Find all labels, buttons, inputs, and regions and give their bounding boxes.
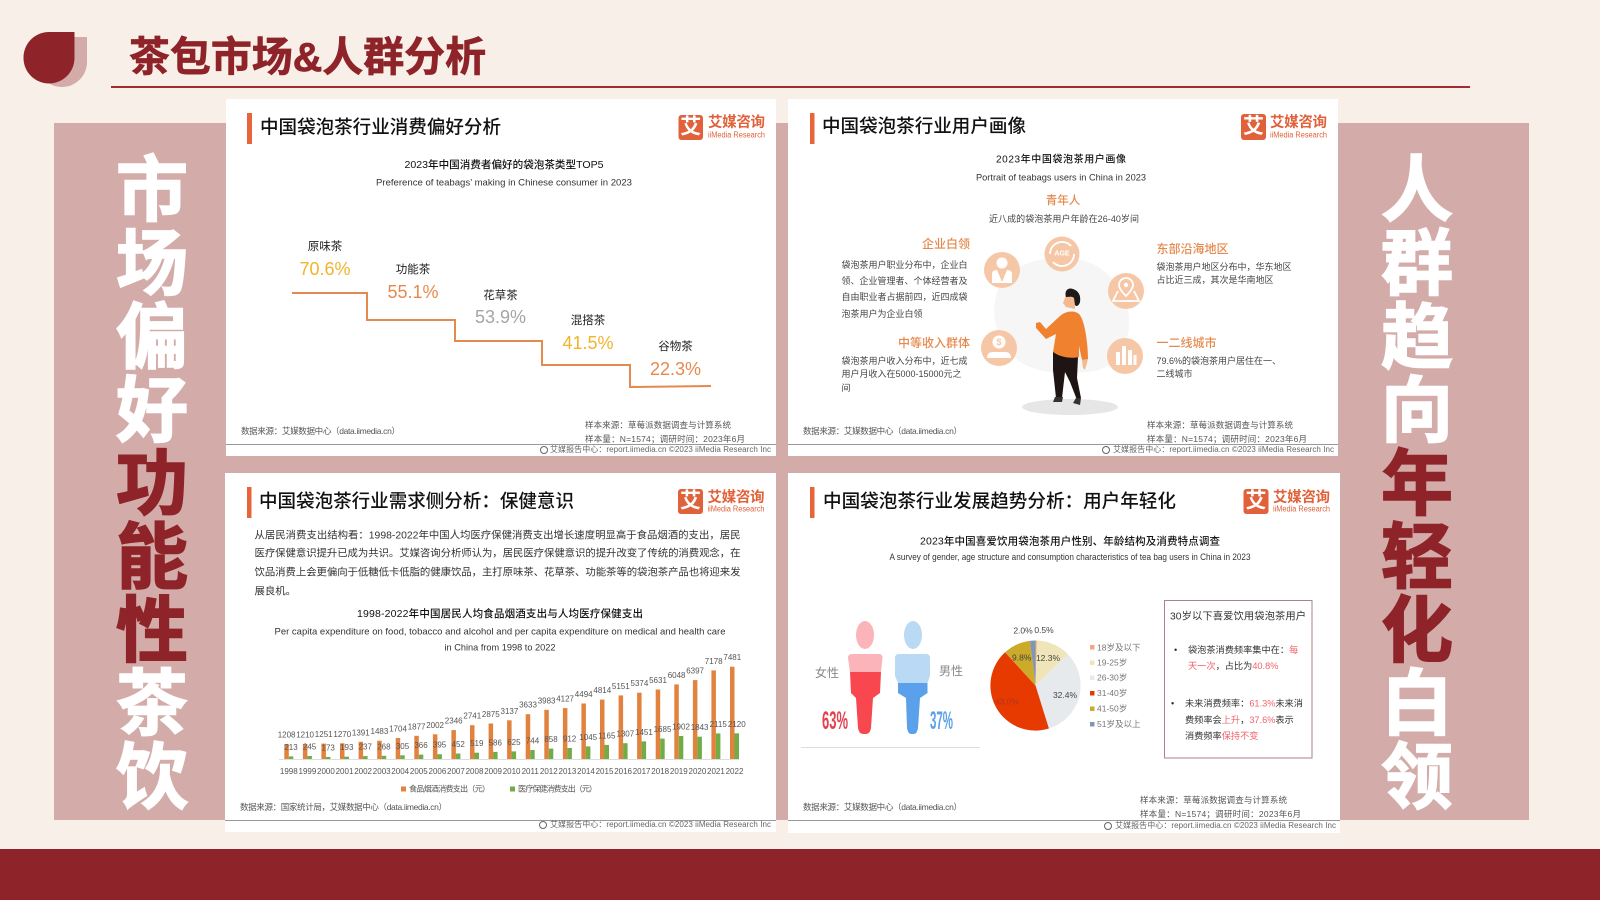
icon: map pin [1108, 273, 1144, 309]
header rule [111, 86, 1470, 88]
chart subtitle: A survey of gender, age structure and consumption characteristics of tea bag users in China in 2023 [890, 552, 1250, 563]
source note: 数据来源：艾媒数据中心（data.iimedia.cn） [241, 426, 400, 436]
pie legend: 18岁及以下 [1097, 642, 1141, 652]
panel: younger users [788, 473, 1340, 833]
intro paragraph [254, 528, 741, 598]
bar chart: 1251 [315, 730, 333, 739]
bar chart: 305 [396, 742, 410, 751]
source note: 数据来源：国家统计局，艾媒数据中心（data.iimedia.cn） [240, 802, 447, 812]
bar chart: 2005 [410, 767, 428, 776]
bar chart: 2004 [391, 767, 410, 776]
bar chart: 1270 [333, 730, 352, 739]
vertical slogan: left: 饮 [116, 738, 188, 818]
logo: 艾媒咨询 [1273, 488, 1330, 506]
figure: female 63%: 63% [822, 707, 848, 735]
panel heading: 中国袋泡茶行业消费偏好分析 [260, 116, 501, 138]
callout: middle income: 用户月收入在5000-15000元之 [842, 368, 962, 379]
step chart: 41.5% [562, 333, 614, 353]
bar chart: 912 [563, 734, 577, 744]
callout: middle income: 间 [842, 382, 851, 393]
callout: young people [989, 193, 1139, 224]
bar chart: 2015 [596, 767, 614, 776]
intro paragraph: 医疗保健意识提升已成为共识。艾媒咨询分析师认为，居民医疗保健意识的提升改变了传统的消费观念，在 [254, 546, 740, 560]
bar chart: 1210 [296, 731, 315, 740]
step chart: 70.6% [299, 259, 351, 279]
sample note: 样本量：N=1574；调研时间：2023年6月 [1147, 434, 1307, 444]
callout: tier cities [1156, 335, 1281, 379]
callout box: 消费频率保持不变 [1185, 730, 1258, 741]
callout: tier cities: 二线城市 [1156, 368, 1193, 379]
step chart: 功能茶 [396, 262, 431, 276]
bar chart: 2022 [726, 767, 744, 776]
vertical slogan: right: 化 [1381, 592, 1453, 672]
callout: eastern coast: 占比近三成，其次是华南地区 [1156, 274, 1274, 285]
vertical slogan: right: 轻 [1381, 518, 1453, 598]
callout: young people: 青年人 [1046, 193, 1081, 207]
bar chart: 1902 [672, 722, 690, 732]
callout: white collar: 领、企业管理者、个体经营者及 [842, 275, 968, 286]
callout: tier cities: 一二线城市 [1156, 335, 1217, 350]
bar chart: 2007 [447, 767, 465, 776]
bar chart: 2009 [484, 767, 503, 776]
step chart: 混搭茶 [571, 314, 606, 327]
bar chart: 1704 [389, 724, 407, 734]
vertical slogan: right [1381, 152, 1453, 818]
sample note: 样本来源：草莓派数据调查与计算系统 [1140, 795, 1287, 805]
pie legend [1090, 642, 1141, 729]
icon: age: AGE [1054, 250, 1070, 258]
bar chart [278, 653, 746, 776]
panel heading: 中国袋泡茶行业发展趋势分析：用户年轻化 [823, 490, 1176, 512]
source note: 数据来源：艾媒数据中心（data.iimedia.cn） [803, 426, 962, 436]
vertical slogan: right: 年 [1381, 445, 1453, 525]
logo: iiMedia Research [1273, 504, 1330, 514]
callout box: 未来消费频率：61.3%未来消 [1185, 698, 1303, 709]
bar chart: 2875 [482, 710, 500, 719]
intro paragraph: 从居民消费支出结构看：1998-2022年中国人均医疗保健消费支出增长速度明显高于食品烟酒的支出，居民 [254, 528, 740, 542]
vertical slogan: right: 白 [1381, 665, 1453, 745]
bar chart: 4814 [593, 686, 612, 695]
bar chart: 2021 [707, 767, 725, 776]
bar chart: 1877 [408, 722, 426, 731]
illustration backdrop blob [994, 258, 1129, 373]
callout box [1164, 600, 1312, 758]
callout box: 袋泡茶消费频率集中在：每 [1188, 644, 1298, 655]
logo: 艾 [680, 490, 701, 512]
bar chart: 1998 [280, 767, 298, 776]
step chart: 53.9% [475, 307, 526, 327]
pie chart: 32.4% [1053, 690, 1077, 700]
bar chart: 2012 [540, 767, 558, 776]
bar chart: 2011 [522, 767, 539, 776]
bar chart: 268 [377, 742, 391, 751]
source note: 数据来源：艾媒数据中心（data.iimedia.cn） [803, 802, 962, 812]
bar chart: 2002 [426, 721, 445, 730]
panel heading: 中国袋泡茶行业需求侧分析：保健意识 [259, 490, 574, 512]
bar chart: 2346 [445, 717, 463, 726]
bar chart: 5631 [649, 676, 667, 685]
bottom band [0, 849, 1600, 900]
callout: middle income [842, 335, 970, 393]
vertical slogan: left: 好 [116, 372, 188, 452]
bar chart: 2006 [429, 767, 447, 776]
icon: business person [984, 252, 1020, 288]
report footer: 艾媒报告中心：report.iimedia.cn ©2023 iiMedia Research Inc [550, 444, 771, 454]
pie legend: 41-50岁 [1097, 704, 1127, 714]
bar chart: 173 [322, 743, 335, 752]
report footer: 艾媒报告中心：report.iimedia.cn ©2023 iiMedia Research Inc [1113, 444, 1334, 454]
vertical slogan: right: 趋 [1381, 298, 1453, 378]
bar chart: 586 [489, 738, 503, 747]
vertical slogan: right: 群 [1381, 225, 1453, 305]
callout: eastern coast: 袋泡茶用户地区分布中，华东地区 [1156, 261, 1292, 272]
figure: male 37% [895, 621, 963, 735]
chart subtitle: Per capita expenditure on food, tobacco and alcohol and per capita expenditure on medical and health care [274, 626, 726, 638]
bar chart: 2000 [317, 767, 335, 776]
bar chart: 2014 [577, 767, 595, 776]
bar chart: 3137 [501, 707, 519, 716]
bar chart: 2115 [710, 720, 727, 729]
chart subtitle: Preference of teabags’ making in Chinese consumer in 2023 [376, 178, 632, 188]
bar chart: 1307 [616, 730, 635, 739]
logo [678, 488, 764, 514]
bar chart: 2019 [670, 767, 688, 776]
sample note: 样本量：N=1574；调研时间：2023年6月 [1140, 809, 1301, 819]
logo: iiMedia Research [708, 130, 765, 140]
sample note: 样本量：N=1574；调研时间：2023年6月 [585, 434, 745, 444]
chart subtitle: in China from 1998 to 2022 [444, 642, 556, 654]
bar chart: 1483 [371, 727, 389, 736]
figure: male 37%: 37% [930, 707, 953, 735]
callout: middle income: 中等收入群体 [898, 335, 970, 350]
bar chart: 1165 [598, 731, 616, 740]
bar chart: 858 [544, 735, 558, 744]
bar chart: 744 [526, 736, 540, 746]
step chart: 花草茶 [483, 289, 518, 302]
step chart [292, 240, 711, 387]
bar chart legend: 食品烟酒消费支出（元） [409, 784, 490, 794]
bar chart: 1045 [579, 733, 598, 742]
bar chart: 2741 [463, 712, 482, 721]
icon: header petal [23, 32, 87, 87]
panel heading: 中国袋泡茶行业用户画像 [822, 116, 1026, 136]
illustration: person [1022, 288, 1118, 415]
logo: 艾 [680, 116, 701, 138]
vertical slogan: left: 能 [116, 518, 188, 598]
pie legend: 51岁及以上 [1097, 719, 1141, 729]
step chart: 原味茶 [308, 240, 343, 253]
bar chart: 2020 [689, 767, 707, 776]
pie legend: 31-40岁 [1097, 688, 1127, 698]
icon: age [1044, 236, 1080, 272]
chart title: 2023年中国消费者偏好的袋泡茶类型TOP5 [404, 158, 604, 171]
pie chart: 2.0% [1013, 626, 1033, 636]
vertical slogan: left [116, 152, 188, 818]
pie chart: 9.8% [1012, 653, 1032, 663]
callout: white collar [842, 236, 970, 319]
bar chart: 4494 [575, 690, 593, 699]
bar chart legend [401, 784, 597, 794]
vertical slogan: right: 领 [1381, 738, 1453, 818]
figure: female 63% [815, 621, 882, 735]
bar chart: 193 [340, 743, 354, 752]
figure: female 63%: 女性 [815, 665, 839, 680]
logo: 艾 [1243, 115, 1264, 138]
callout box: 30岁以下喜爱饮用袋泡茶用户 [1170, 610, 1306, 622]
bar chart: 237 [359, 743, 373, 752]
vertical slogan: right: 向 [1381, 372, 1453, 452]
bar chart: 2001 [336, 767, 354, 776]
bar chart: 7178 [705, 657, 723, 666]
callout: white collar: 泡茶用户为企业白领 [842, 308, 923, 319]
icon: income: $ [996, 337, 1002, 347]
logo: iiMedia Research [1270, 130, 1327, 140]
bar chart: 3983 [538, 696, 556, 705]
bar chart: 5151 [612, 682, 630, 691]
vertical slogan: left: 茶 [116, 665, 188, 745]
bar chart: 7481 [723, 653, 742, 662]
bar chart: 395 [433, 741, 447, 750]
pie chart [990, 625, 1081, 731]
panel: consumption preference [226, 99, 776, 456]
bar chart: 213 [284, 743, 298, 752]
icon: income [981, 330, 1017, 366]
bar chart: 5374 [631, 679, 649, 688]
bar chart: 2013 [559, 767, 577, 776]
bar chart: 6397 [686, 667, 705, 676]
bar chart: 2008 [466, 767, 484, 776]
callout: eastern coast [1156, 241, 1292, 285]
bar chart: 2017 [633, 767, 651, 776]
bar chart: 519 [470, 739, 484, 748]
chart subtitle: Portrait of teabags users in China in 2023 [976, 172, 1146, 184]
chart subtitle [274, 626, 726, 654]
bar chart: 366 [414, 741, 428, 750]
vertical slogan: left: 偏 [116, 298, 188, 378]
sample note [1140, 795, 1301, 819]
logo: 艾媒咨询 [708, 488, 764, 506]
pie chart: 0.5% [1034, 625, 1054, 635]
step chart: 谷物茶 [658, 339, 693, 353]
report footer: 艾媒报告中心：report.iimedia.cn ©2023 iiMedia Research Inc [550, 819, 771, 829]
callout: tier cities: 79.6%的袋泡茶用户居住在一、 [1156, 355, 1281, 366]
vertical slogan: left: 功 [116, 445, 188, 525]
gender figures [801, 621, 980, 748]
logo: iiMedia Research [708, 504, 764, 514]
bar chart: 452 [452, 740, 465, 749]
bar chart: 2010 [503, 767, 521, 776]
chart title: 2023年中国袋泡茶用户画像 [996, 152, 1126, 166]
bar chart legend: 医疗保健消费支出（元） [518, 784, 597, 794]
sample note [1147, 420, 1307, 444]
step chart: 22.3% [650, 359, 701, 379]
callout box: • [1174, 645, 1177, 655]
bar chart: 625 [507, 738, 521, 747]
figure: male 37%: 男性 [939, 664, 963, 678]
bar chart: 2003 [373, 767, 391, 776]
pie chart: 43.0% [995, 697, 1019, 707]
bar chart: 4127 [556, 695, 575, 704]
bar chart: 2002 [354, 767, 373, 776]
logo: 艾媒咨询 [1270, 113, 1327, 131]
callout: white collar: 自由职业者占据前四，近四成袋 [842, 291, 968, 302]
logo [1244, 488, 1330, 514]
logo [678, 113, 765, 140]
callout box: 费频率会上升，37.6%表示 [1185, 714, 1294, 725]
callout: young people: 近八成的袋泡茶用户年龄在26-40岁间 [989, 213, 1139, 224]
callout box: 天一次，占比为40.8% [1188, 660, 1278, 671]
callout: white collar: 袋泡茶用户职业分布中，企业白 [842, 259, 968, 270]
logo [1241, 113, 1327, 140]
icon: city bars [1107, 338, 1143, 374]
bar chart: 1685 [654, 725, 672, 734]
bar chart: 245 [303, 742, 317, 752]
callout: white collar: 企业白领 [922, 236, 970, 251]
logo: 艾 [1246, 490, 1266, 512]
vertical slogan: left: 性 [116, 592, 188, 672]
sample note: 样本来源：草莓派数据调查与计算系统 [585, 420, 731, 430]
vertical slogan: left: 场 [116, 225, 188, 305]
callout: eastern coast: 东部沿海地区 [1156, 241, 1229, 256]
bar chart: 6048 [668, 671, 686, 680]
bar chart: 1999 [299, 767, 317, 776]
sample note: 样本来源：草莓派数据调查与计算系统 [1147, 420, 1293, 430]
pie legend: 19-25岁 [1097, 658, 1127, 668]
bar chart: 1451 [635, 728, 653, 737]
panel: user portrait [788, 99, 1338, 456]
chart title: 1998-2022年中国居民人均食品烟酒支出与人均医疗保健支出 [357, 607, 643, 620]
vertical slogan: right: 人 [1381, 152, 1453, 232]
bar chart: 3633 [519, 701, 537, 710]
vertical slogan: left: 市 [116, 152, 188, 232]
bar chart: 2120 [728, 720, 746, 729]
step chart: 55.1% [387, 282, 439, 302]
callout box: • [1171, 699, 1174, 709]
bar chart: 1391 [352, 728, 370, 737]
callout: middle income: 袋泡茶用户收入分布中，近七成 [842, 355, 968, 366]
intro paragraph: 饮品消费上会更偏向于低糖低卡低脂的健康饮品，主打原味茶、花草茶、功能茶等的袋泡茶产品也将迎来发 [254, 566, 741, 578]
logo: 艾媒咨询 [708, 113, 765, 131]
bar chart: 2018 [651, 767, 670, 776]
bar chart: 2016 [614, 767, 633, 776]
report footer: 艾媒报告中心：report.iimedia.cn ©2023 iiMedia Research Inc [1115, 820, 1336, 830]
intro paragraph: 展良机。 [254, 584, 296, 598]
panel: health awareness [225, 473, 776, 832]
bar chart: 1208 [278, 731, 296, 740]
pink backdrop panel [54, 123, 1529, 820]
chart title: 2023年中国喜爱饮用袋泡茶用户性别、年龄结构及消费特点调查 [920, 534, 1220, 548]
pie legend: 26-30岁 [1097, 673, 1127, 683]
bar chart: 1843 [691, 723, 709, 732]
sample note [585, 420, 745, 444]
pie chart: 12.3% [1036, 653, 1060, 663]
title: 茶包市场&人群分析 [129, 34, 486, 80]
